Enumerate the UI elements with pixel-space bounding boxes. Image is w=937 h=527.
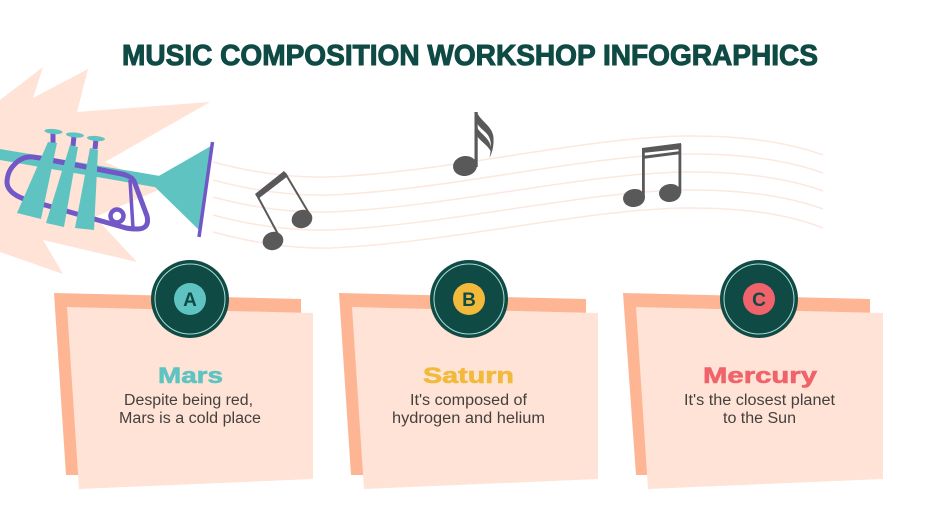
heading: Mars: Mars [158, 363, 223, 388]
badge B: B [462, 290, 476, 311]
panel: Mercury [623, 260, 883, 489]
badge B [430, 260, 508, 338]
text: Mars description [119, 392, 261, 427]
text: Mars description: Mars is a cold place [119, 410, 261, 427]
text: Mars description: Despite being red, [124, 392, 253, 409]
icon: beamed eighth note [255, 171, 315, 253]
badge C: C [752, 290, 766, 311]
badge A: A [183, 290, 197, 311]
text: Saturn description: hydrogen and helium [392, 410, 545, 427]
icon: sixteenth note [452, 112, 494, 178]
heading: Saturn: Saturn [423, 363, 514, 388]
badge A [151, 260, 229, 338]
text: Mercury description: It's the closest planet [684, 392, 836, 409]
music staff [213, 136, 823, 248]
heading: Mercury: Mercury [703, 363, 818, 388]
badge C [720, 260, 798, 338]
text: Saturn description [392, 392, 545, 427]
icon: beamed sixteenth notes [622, 143, 682, 208]
icon: trumpet [0, 128, 212, 237]
text: Mercury description [684, 392, 836, 427]
text: Mercury description: to the Sun [723, 410, 796, 427]
title: MUSIC COMPOSITION WORKSHOP INFOGRAPHICS [122, 40, 818, 72]
burst behind trumpet [0, 67, 210, 274]
panel: Saturn [339, 260, 598, 489]
text: Saturn description: It's composed of [410, 392, 528, 409]
panel: Mars [54, 260, 313, 489]
